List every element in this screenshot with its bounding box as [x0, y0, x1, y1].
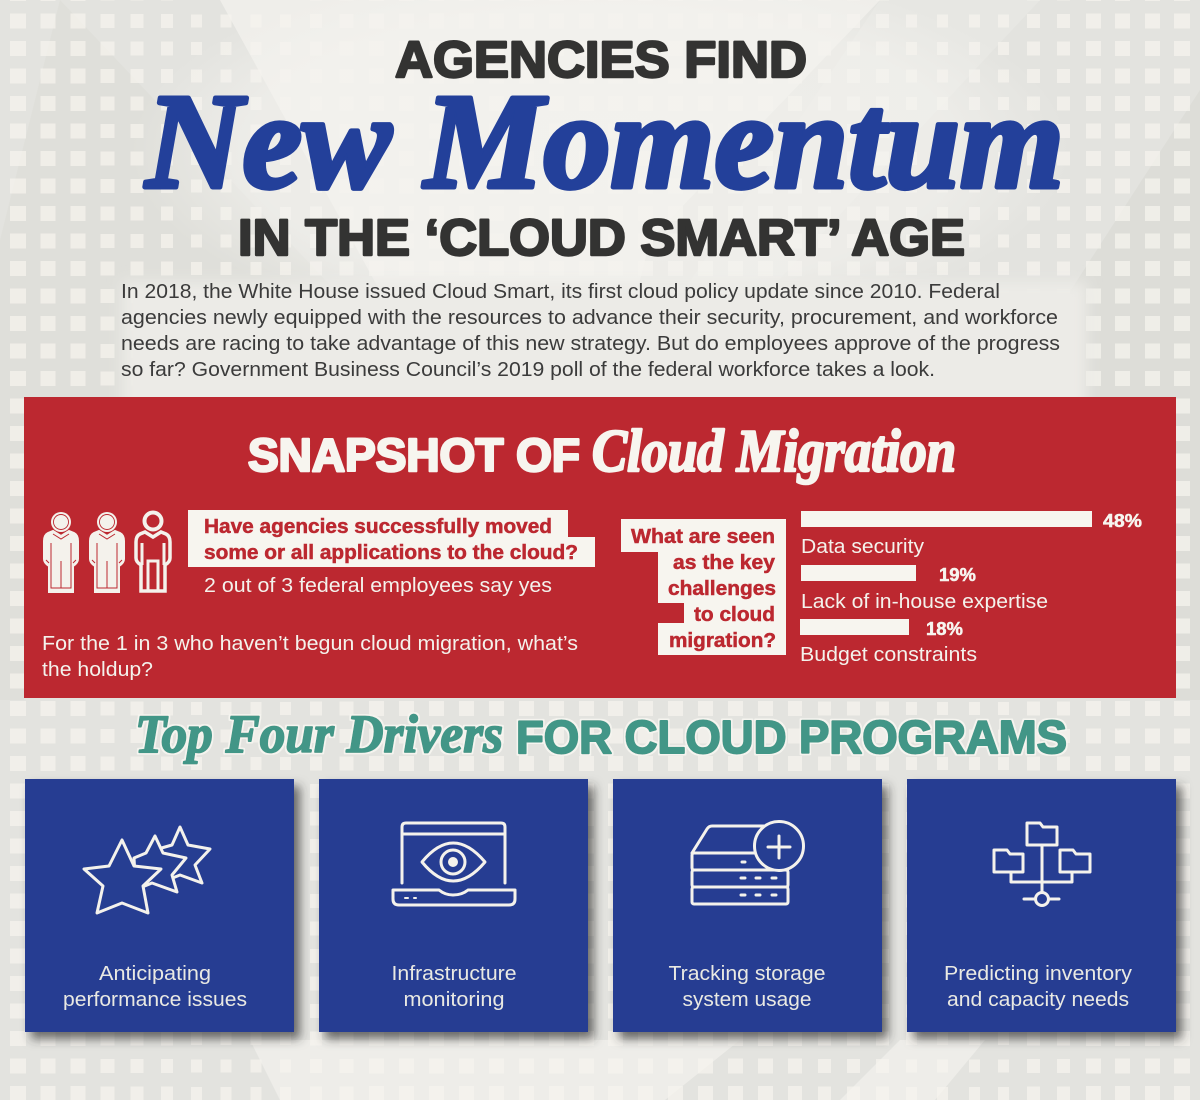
bar: lack of in-house expertise 19%: 19%	[939, 565, 976, 585]
bar: lack of in-house expertise 19%: Lack of in-house expertise	[801, 591, 1048, 613]
heading: top four drivers: Top Four Drivers	[135, 704, 503, 764]
card label: monitoring	[404, 989, 504, 1011]
icon: laptop with eye	[393, 823, 515, 905]
intro paragraph: In 2018, the White House issued Cloud Smart, its first cloud policy update since 2010. Federal	[121, 281, 1000, 303]
title line 1: AGENCIES FIND	[395, 31, 807, 88]
snapshot heading: SNAPSHOT OF	[248, 429, 580, 481]
card label: Anticipating	[99, 963, 211, 985]
card label	[63, 963, 247, 1011]
icon: stars	[84, 827, 210, 913]
intro paragraph: so far? Government Business Council’s 2019 poll of the federal workforce takes a look.	[121, 359, 935, 381]
answer text: 2 out of 3 federal employees say yes	[204, 575, 552, 597]
panel: predicting inventory and capacity needs	[907, 779, 1176, 1032]
card label: and capacity needs	[947, 989, 1129, 1011]
bar: data security 48%	[801, 511, 1142, 558]
card label: Predicting inventory	[944, 963, 1132, 985]
intro paragraph: agencies newly equipped with the resources to advance their security, procurement, and workforce	[121, 307, 1058, 329]
bar chart: key challenges	[800, 511, 1142, 666]
bar: data security 48%: Data security	[801, 536, 924, 558]
bar: budget constraints 18%	[800, 619, 977, 666]
card label: performance issues	[63, 989, 247, 1011]
icon: folder network	[994, 823, 1090, 906]
card label	[944, 963, 1132, 1011]
snapshot heading	[248, 418, 956, 484]
title line 3: IN THE ‘CLOUD SMART’ AGE	[238, 209, 965, 266]
callout: migration question: some or all applications to the cloud?	[204, 542, 578, 564]
card label: Infrastructure	[392, 963, 516, 985]
callout: migration question: Have agencies successfully moved	[204, 516, 552, 538]
card label: Tracking storage	[668, 963, 826, 985]
intro paragraph: needs are racing to take advantage of this new strategy. But do employees approve of the progress	[121, 333, 1060, 355]
callout: challenges question: migration?	[669, 630, 776, 652]
bar: data security 48%: 48%	[1103, 511, 1142, 531]
callout: challenges question: as the key	[673, 552, 776, 574]
intro paragraph	[121, 281, 1060, 381]
icon: storage stack with plus	[692, 822, 804, 904]
bar: budget constraints 18%: 18%	[926, 619, 963, 639]
bar: budget constraints 18%: Budget constraints	[800, 644, 977, 666]
callout: migration question	[188, 510, 595, 567]
bar: lack of in-house expertise 19%	[801, 565, 1048, 613]
holdup text	[42, 633, 578, 681]
heading: top four drivers: FOR CLOUD PROGRAMS	[516, 711, 1067, 763]
panel: infrastructure monitoring	[319, 779, 588, 1032]
holdup text: For the 1 in 3 who haven’t begun cloud migration, what’s	[42, 633, 578, 655]
holdup text: the holdup?	[42, 659, 153, 681]
snapshot heading: Cloud Migration	[592, 418, 956, 484]
callout: challenges question	[621, 519, 786, 655]
panel: snapshot of cloud migration	[24, 397, 1176, 698]
title script line: New Momentum	[144, 67, 1064, 217]
panel: anticipating performance issues	[25, 779, 294, 1032]
card label: system usage	[682, 989, 812, 1011]
callout: challenges question: What are seen	[631, 526, 775, 548]
person 1	[44, 512, 78, 592]
callout: challenges question: challenges	[668, 578, 776, 600]
panel: tracking storage system usage	[613, 779, 882, 1032]
heading: top four drivers	[135, 704, 1067, 764]
card label	[392, 963, 516, 1011]
person 3	[136, 512, 170, 591]
card label	[668, 963, 826, 1011]
person 2	[90, 512, 124, 592]
icon: three people, two filled	[44, 512, 170, 592]
title	[144, 31, 1064, 266]
callout: challenges question: to cloud	[694, 604, 775, 626]
